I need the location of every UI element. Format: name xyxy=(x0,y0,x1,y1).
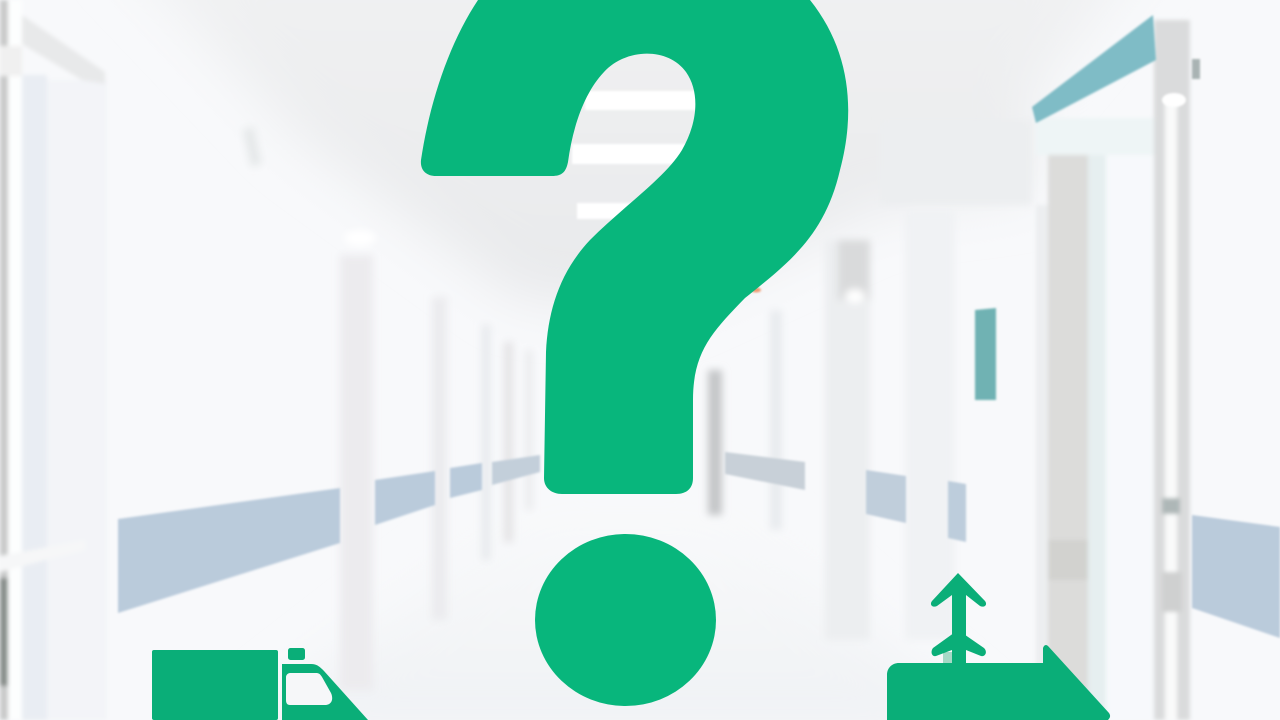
large right arrow xyxy=(887,645,1110,720)
floor xyxy=(230,500,1000,720)
left corridor doors xyxy=(243,127,532,690)
question mark hook and stem xyxy=(421,0,848,494)
left doors xyxy=(0,0,107,720)
right wall rail xyxy=(725,452,1280,638)
question mark xyxy=(421,0,848,706)
ambulance beacon xyxy=(288,648,305,660)
pale stem shadow xyxy=(943,652,953,663)
ceiling lights xyxy=(572,91,700,219)
question mark dot xyxy=(535,534,716,706)
icon: ambulance xyxy=(152,648,368,720)
left wall rail xyxy=(118,455,540,613)
teal door header xyxy=(1032,15,1156,123)
ambulance window xyxy=(286,673,332,705)
up arrow with double heads xyxy=(931,573,986,663)
right corridor doors xyxy=(708,210,955,640)
small orange light xyxy=(751,288,761,292)
near right door xyxy=(1036,0,1280,720)
side panel above right doors xyxy=(880,120,1032,205)
lower arrow head xyxy=(932,630,986,656)
ambulance cargo box xyxy=(152,650,278,720)
ceiling xyxy=(110,0,1160,310)
ambulance cabin xyxy=(282,664,368,720)
door handle xyxy=(1162,93,1186,107)
teal wall panel xyxy=(975,308,996,400)
icon: direction arrows xyxy=(887,573,1110,720)
door sensor xyxy=(1192,59,1200,79)
